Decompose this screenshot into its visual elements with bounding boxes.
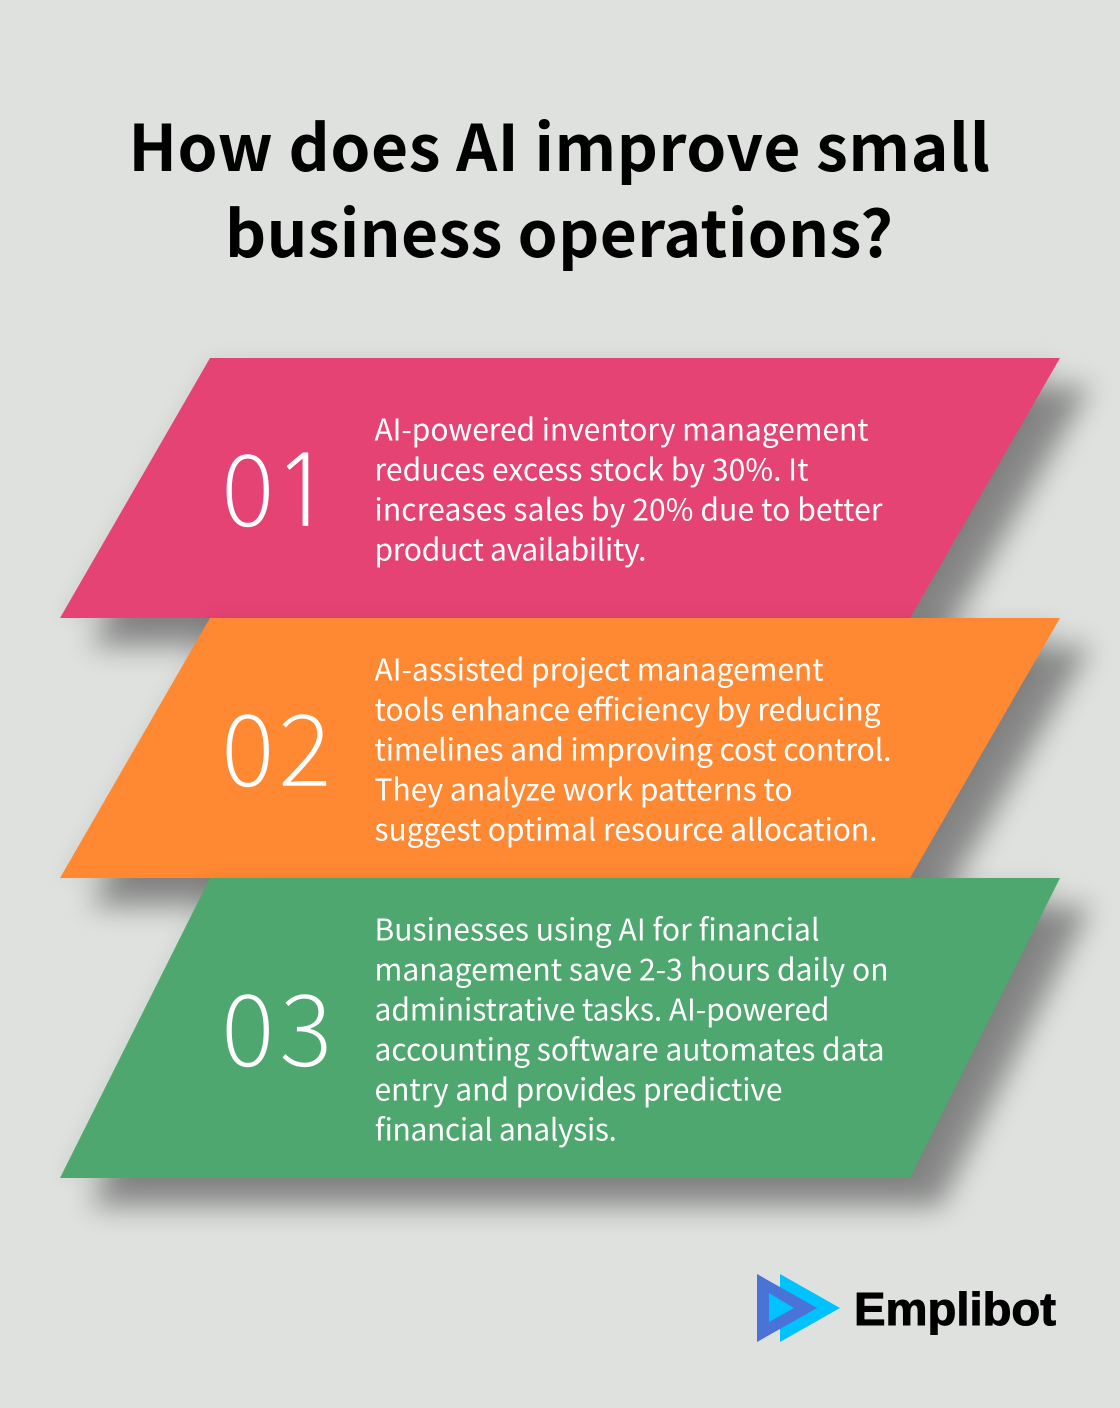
text: step 03 description: entry and provides predictive <box>374 1066 782 1110</box>
text: step 03 description <box>374 906 888 1150</box>
text: step 03 description: Businesses using AI for financial <box>374 906 820 950</box>
text: step 02 description <box>374 646 892 850</box>
title: business operations? <box>225 184 893 276</box>
pink parallelogram <box>60 358 1060 618</box>
text: step 01 description: reduces excess stock by 30%. It <box>374 446 808 490</box>
text: step 03 description: accounting software automates data <box>374 1026 884 1070</box>
text: step 02 description: suggest optimal resource allocation. <box>374 806 878 850</box>
text: step 03 description: management save 2-3 hours daily on <box>374 946 888 990</box>
title: How does AI improve small <box>128 98 990 190</box>
text: step 02 description: tools enhance efficiency by reducing <box>374 686 881 730</box>
text: step 02 description: They analyze work patterns to <box>374 766 792 810</box>
number 03 <box>221 950 332 1095</box>
wordmark: Emplibot <box>854 1283 1056 1335</box>
number 02: 0 <box>221 670 274 815</box>
text: step 01 description: AI-powered inventory management <box>374 406 868 450</box>
panel: step 02 project management <box>60 618 1060 878</box>
panel: step 01 inventory management <box>60 358 1060 618</box>
number 02: 2 <box>278 670 332 815</box>
green parallelogram <box>60 878 1060 1178</box>
text: step 02 description: timelines and improving cost control. <box>374 726 892 770</box>
orange parallelogram <box>60 618 1060 878</box>
text: step 01 description <box>374 406 883 570</box>
number 03: 3 <box>279 950 332 1095</box>
text: step 01 description: increases sales by 20% due to better <box>374 486 883 530</box>
text: step 02 description: AI-assisted project management <box>374 646 824 690</box>
number 01: 1 <box>272 441 333 541</box>
text: step 03 description: administrative tasks. AI-powered <box>374 986 830 1030</box>
title <box>128 98 990 276</box>
logo: Emplibot <box>757 1274 1056 1342</box>
number 03: 0 <box>221 950 274 1095</box>
number 02 <box>221 670 332 815</box>
panel: step 03 financial management <box>60 878 1060 1178</box>
number 01 <box>221 410 333 555</box>
number 01: 0 <box>221 410 274 555</box>
text: step 03 description: financial analysis. <box>375 1106 617 1150</box>
text: step 01 description: product availability. <box>374 526 646 570</box>
icon: play triangles <box>757 1274 840 1342</box>
